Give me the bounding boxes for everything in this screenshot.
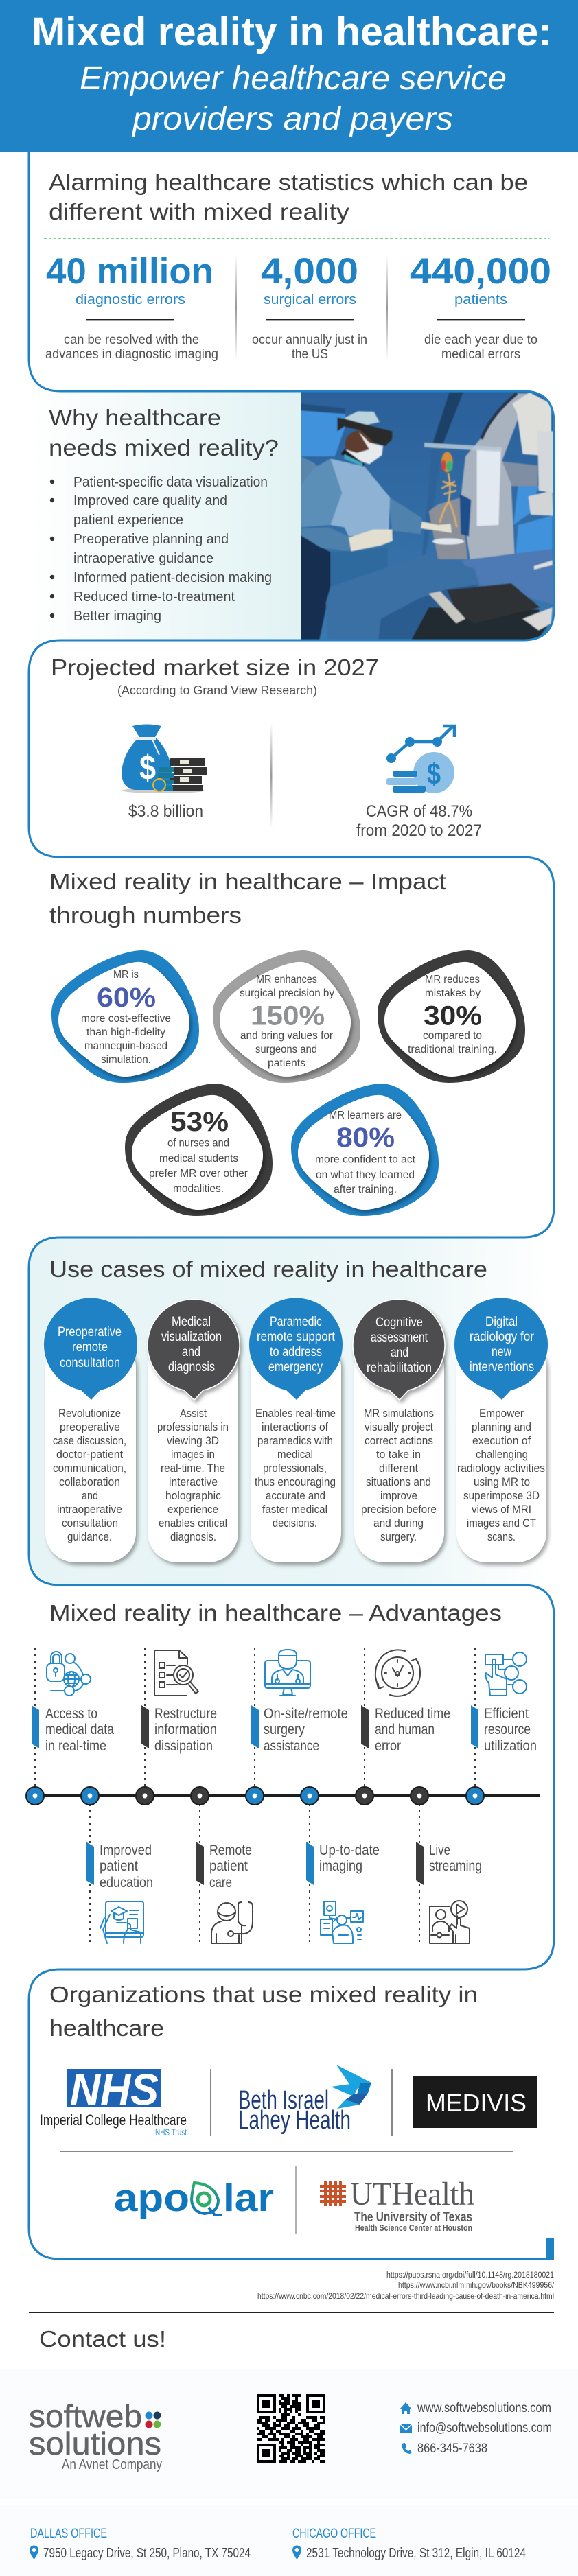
heading — [49, 1982, 478, 2041]
card: digital radiology: radiology activities — [457, 1462, 545, 1475]
card: paramedic remote support: emergency — [268, 1360, 323, 1374]
card: cognitive assessment and rehabilitation: MR simulations — [364, 1407, 434, 1420]
blob: 30 percent: 30% — [424, 1000, 482, 1031]
icon: growth chart with coin — [386, 726, 454, 793]
card: cognitive assessment and rehabilitation: situations and — [366, 1475, 431, 1488]
text: remote patient care: care — [209, 1875, 232, 1890]
text: improved patient education: education — [100, 1875, 153, 1890]
heading: healthcare — [49, 2015, 164, 2041]
title: Mixed reality in healthcare: — [32, 10, 552, 54]
blob: 60 percent: than high-fidelity — [86, 1027, 165, 1038]
card: digital radiology: views of MRI — [472, 1503, 531, 1516]
subtitle: Empower healthcare service — [80, 60, 507, 97]
card: preoperative remote consultation — [44, 1298, 137, 1562]
stat: 4,000: 4,000 — [261, 251, 358, 292]
logo: apoQlar — [114, 2176, 274, 2220]
card: paramedic remote support: faster medical — [262, 1503, 327, 1516]
timeline — [26, 1787, 540, 1805]
card: digital radiology: execution of — [472, 1434, 531, 1447]
text: up-to-date imaging: imaging — [319, 1858, 362, 1874]
stat: 440,000: patients — [454, 292, 507, 307]
heading: Use cases of mixed reality in healthcare — [49, 1256, 487, 1282]
bullet list: Patient-specific data visualization — [73, 475, 268, 490]
card: paramedic remote support: interactions of — [262, 1420, 328, 1433]
card: cognitive assessment and rehabilitation: correct actions — [365, 1434, 433, 1447]
icon: lock and globe — [47, 1652, 91, 1696]
stat: 440,000: medical errors — [441, 347, 520, 362]
stat: 4,000 — [252, 251, 367, 362]
card: paramedic remote support: thus encouraging — [255, 1475, 336, 1488]
logo: Beth Israel Lahey Health — [238, 2065, 371, 2135]
panel: why healthcare needs mixed reality — [49, 392, 555, 642]
text: on-site remote surgery: assistance — [264, 1738, 319, 1754]
blob: 150 percent: MR enhances — [256, 974, 317, 985]
references — [257, 2271, 555, 2301]
contact details: 866-345-7638 — [417, 2442, 487, 2456]
card: cognitive assessment and rehabilitation: rehabilitation — [367, 1361, 432, 1375]
card: preoperative remote consultation: intraoperative — [57, 1503, 122, 1516]
logo: UTHealth: Health Science Center at Houston — [355, 2223, 472, 2233]
card: digital radiology — [454, 1298, 548, 1562]
references: https://www.ncbi.nlm.nih.gov/books/NBK499956/ — [398, 2282, 555, 2290]
panel outline ribbon — [29, 152, 554, 2259]
card: medical visualization and diagnosis: and — [182, 1345, 200, 1359]
blob: 80 percent — [291, 1084, 439, 1216]
card: digital radiology: scans. — [487, 1530, 516, 1543]
bullet list: patient experience — [73, 513, 183, 528]
blob: 60 percent — [51, 950, 199, 1083]
blob: 53 percent: 53% — [170, 1107, 229, 1137]
card: medical visualization and diagnosis: Assist — [180, 1407, 207, 1420]
blob: 53 percent: medical students — [159, 1153, 238, 1164]
photo: surgeon with mixed reality headset — [301, 392, 555, 642]
CAGR text: CAGR of 48.7% — [366, 802, 472, 821]
blob: 60 percent: mannequin-based — [84, 1040, 167, 1052]
heading: Alarming healthcare statistics which can be — [49, 169, 528, 195]
CAGR text — [356, 802, 482, 840]
heading — [49, 405, 279, 460]
bullet list: Informed patient-decision making — [73, 570, 272, 585]
card: paramedic remote support: decisions. — [273, 1517, 317, 1530]
icon: home — [400, 2402, 412, 2414]
heading: Why healthcare — [49, 405, 221, 430]
card: paramedic remote support: to address — [270, 1345, 322, 1359]
blob: 150 percent: patients — [268, 1057, 305, 1069]
card: digital radiology: new — [492, 1345, 511, 1359]
card: medical visualization and diagnosis: visualization — [161, 1330, 222, 1344]
card: paramedic remote support: paramedics with — [257, 1434, 333, 1447]
blob: 150 percent: 150% — [251, 1000, 325, 1031]
subtitle: providers and payers — [131, 101, 453, 137]
card: digital radiology: superimpose 3D — [463, 1489, 540, 1502]
blob: 53 percent: prefer MR over other — [149, 1168, 248, 1180]
text: efficient resource utilization: resource — [484, 1722, 531, 1737]
blob: 150 percent: surgical precision by — [240, 987, 334, 999]
logo: Medivis: MEDIVIS — [426, 2089, 527, 2117]
panel background: why healthcare — [29, 391, 301, 640]
card: medical visualization and diagnosis: interactive — [169, 1475, 218, 1488]
references: https://pubs.rsna.org/doi/full/10.1148/rg.2018180021 — [386, 2271, 554, 2280]
source note: (According to Grand View Research) — [117, 683, 317, 697]
text: efficient resource utilization — [484, 1706, 537, 1754]
text: restructure information: Restructure — [154, 1706, 217, 1722]
heading: Organizations that use mixed reality in — [49, 1982, 478, 2007]
bullet list: Reduced time-to-treatment — [73, 589, 235, 605]
blob: 80 percent: after training. — [334, 1184, 397, 1195]
text: access to medical data — [45, 1706, 114, 1754]
card: paramedic remote support: Paramedic — [270, 1315, 322, 1329]
contact details — [400, 2401, 552, 2456]
stat: 40 million: can be resolved with the — [64, 333, 199, 347]
text: restructure information — [154, 1706, 217, 1754]
card: preoperative remote consultation: consultation — [60, 1356, 120, 1370]
card: cognitive assessment and rehabilitation: to take in — [376, 1448, 421, 1461]
heading: Mixed reality in healthcare – Advantages — [49, 1600, 502, 1626]
heading — [49, 869, 446, 928]
dallas office: 7950 Legacy Drive, St 250, Plano, TX 75024 — [43, 2546, 251, 2561]
card: paramedic remote support: remote support — [257, 1330, 336, 1344]
chicago office: CHICAGO OFFICE — [292, 2527, 376, 2541]
text: improved patient education: patient — [100, 1858, 138, 1874]
tab markers — [32, 1705, 478, 1885]
card: cognitive assessment and rehabilitation: improve — [380, 1489, 417, 1502]
bullet list: intraoperative guidance — [73, 551, 213, 566]
logo: Medivis — [413, 2076, 537, 2128]
logo: NHS Imperial College Healthcare: Imperial College Healthcare — [40, 2111, 187, 2129]
dallas office — [30, 2527, 251, 2561]
subtitle — [80, 60, 507, 137]
card: preoperative remote consultation: and — [82, 1489, 98, 1502]
panel: organizations — [40, 1982, 554, 2260]
text: restructure information: dissipation — [154, 1738, 213, 1754]
heading: needs mixed reality? — [49, 435, 279, 460]
logo: NHS Imperial College Healthcare: NHS Trust — [155, 2127, 187, 2138]
bullet list: Better imaging — [73, 609, 161, 624]
text: on-site remote surgery — [264, 1706, 348, 1754]
contact details: info@softwebsolutions.com — [417, 2421, 552, 2435]
icon: clock — [375, 1650, 420, 1696]
text: reduced time — [375, 1706, 450, 1754]
card: medical visualization and diagnosis: images in — [171, 1448, 215, 1461]
text: up-to-date imaging: Up-to-date — [319, 1842, 380, 1858]
panel: use cases — [44, 1256, 548, 1562]
blob: 60 percent: MR is — [113, 969, 139, 981]
card: paramedic remote support — [249, 1298, 343, 1562]
card: paramedic remote support: professionals, — [263, 1462, 327, 1475]
card: cognitive assessment and rehabilitation: and during — [373, 1517, 424, 1530]
logo: apoQlar: lar — [223, 2176, 274, 2220]
card: preoperative remote consultation: consultation — [62, 1517, 118, 1530]
icon: live streaming — [430, 1901, 470, 1943]
logo: softweb solutions: solutions — [29, 2426, 161, 2461]
stat: 40 million: advances in diagnostic imaging — [45, 347, 218, 362]
icon: envelope — [400, 2424, 412, 2433]
bullet list — [50, 475, 272, 624]
blob: 53 percent: of nurses and — [167, 1138, 229, 1149]
heading: Mixed reality in healthcare – Impact — [49, 869, 446, 894]
text: improved patient education: Improved — [100, 1842, 152, 1858]
text: live streaming — [429, 1842, 482, 1874]
icon: money bag — [122, 725, 207, 793]
heading: Projected market size in 2027 — [51, 655, 379, 680]
footer: offices — [0, 2505, 578, 2576]
card: digital radiology: interventions — [470, 1360, 534, 1374]
card: medical visualization and diagnosis: viewing 3D — [167, 1434, 219, 1447]
contact details: www.softwebsolutions.com — [417, 2401, 551, 2415]
text: efficient resource utilization: utilization — [484, 1738, 537, 1754]
text: access to medical data: medical data — [45, 1722, 114, 1737]
icon: hand and network — [485, 1652, 527, 1696]
card: medical visualization and diagnosis: experience — [167, 1503, 218, 1516]
text: on-site remote surgery: surgery — [264, 1722, 305, 1737]
card: medical visualization and diagnosis: diagnosis. — [170, 1530, 216, 1543]
text: remote patient care: patient — [209, 1858, 248, 1874]
text: reduced time: error — [375, 1738, 401, 1754]
bullet list: Preoperative planning and — [73, 532, 229, 547]
heading: through numbers — [49, 902, 242, 928]
heading — [49, 169, 528, 224]
text: access to medical data: in real-time — [45, 1738, 106, 1754]
text: restructure information: information — [154, 1722, 217, 1737]
dallas office: DALLAS OFFICE — [30, 2527, 107, 2541]
card: medical visualization and diagnosis: holographic — [165, 1489, 221, 1502]
blob: 80 percent: more confident to act — [315, 1154, 416, 1165]
stat: 440,000: 440,000 — [410, 251, 551, 292]
card: medical visualization and diagnosis — [148, 1299, 240, 1562]
icon: doctor with stethoscope — [211, 1902, 253, 1943]
card: preoperative remote consultation: preoperative — [60, 1420, 120, 1433]
text: reduced time: Reduced time — [375, 1706, 450, 1722]
logo: Beth Israel Lahey Health: Beth Israel — [238, 2086, 329, 2115]
stat: 440,000 — [410, 251, 551, 362]
stat: 4,000: occur annually just in — [252, 333, 367, 347]
card: cognitive assessment and rehabilitation: assessment — [371, 1331, 428, 1345]
card: paramedic remote support: medical — [277, 1448, 313, 1461]
stat: 440,000: die each year due to — [424, 333, 537, 347]
card: medical visualization and diagnosis: diagnosis — [168, 1360, 215, 1374]
card: cognitive assessment and rehabilitation: precision before — [361, 1503, 437, 1516]
logo: apoQlar: apo — [114, 2176, 189, 2220]
blob: 53 percent: modalities. — [173, 1183, 224, 1195]
card: digital radiology: radiology for — [470, 1330, 535, 1344]
blob: 150 percent: and bring values for — [240, 1030, 334, 1042]
QR code — [257, 2396, 325, 2461]
card: paramedic remote support: accurate and — [266, 1489, 325, 1502]
text: up-to-date imaging — [319, 1842, 380, 1874]
text: live streaming: streaming — [429, 1858, 482, 1874]
blob: 30 percent — [378, 950, 525, 1083]
blob: 30 percent: traditional training. — [408, 1044, 497, 1055]
card: digital radiology: Digital — [485, 1315, 518, 1329]
card: preoperative remote consultation: guidance. — [67, 1530, 112, 1543]
card: cognitive assessment and rehabilitation: Cognitive — [375, 1315, 423, 1330]
card: digital radiology: using MR to — [474, 1475, 530, 1488]
stat: 40 million: diagnostic errors — [76, 292, 185, 307]
chicago office — [292, 2527, 526, 2561]
logo: softweb solutions — [29, 2398, 162, 2472]
panel: alarming statistics — [44, 169, 551, 362]
card: medical visualization and diagnosis: Medical — [172, 1315, 211, 1329]
icon: monitor with doctor — [265, 1650, 310, 1696]
card: medical visualization and diagnosis: real-time. The — [161, 1462, 225, 1475]
card: cognitive assessment and rehabilitation: and — [391, 1346, 408, 1360]
text: access to medical data: Access to — [45, 1706, 97, 1722]
panel background: use cases — [29, 1237, 549, 1585]
text: on-site remote surgery: On-site/remote — [264, 1706, 348, 1722]
logo: UTHealth: The University of Texas — [354, 2210, 472, 2225]
card: preoperative remote consultation: remote — [72, 1340, 108, 1355]
blob: 60 percent: 60% — [97, 983, 156, 1013]
blob: 60 percent: more cost-effective — [81, 1013, 171, 1024]
card: cognitive assessment and rehabilitation: visually project — [365, 1420, 433, 1433]
icon: tablet education — [100, 1901, 143, 1943]
blob: 30 percent: MR reduces — [425, 974, 480, 985]
blob: 30 percent: mistakes by — [425, 987, 481, 999]
text: remote patient care — [209, 1842, 252, 1890]
card: cognitive assessment and rehabilitation: surgery. — [380, 1530, 417, 1543]
card: digital radiology: Empower — [479, 1407, 524, 1420]
text: live streaming: Live — [429, 1842, 450, 1858]
header banner — [0, 0, 578, 152]
card: preoperative remote consultation: Preoperative — [58, 1325, 122, 1339]
text: remote patient care: Remote — [209, 1842, 252, 1858]
card: preoperative remote consultation: collaboration — [59, 1475, 120, 1488]
blob: 150 percent — [213, 950, 360, 1083]
card: preoperative remote consultation: doctor-patient — [56, 1448, 123, 1461]
logo: softweb solutions: softweb — [29, 2398, 142, 2434]
stat: 40 million — [45, 251, 218, 362]
card: preoperative remote consultation: Revolutionize — [58, 1407, 121, 1420]
card: digital radiology: planning and — [472, 1420, 531, 1433]
logo: softweb solutions: An Avnet Company — [62, 2457, 162, 2472]
footer: contact band — [0, 2369, 578, 2499]
blob: 30 percent: compared to — [423, 1030, 482, 1042]
logo: UTHealth: UTHealth — [350, 2176, 474, 2212]
card: preoperative remote consultation: communication, — [53, 1462, 126, 1475]
logo: Beth Israel Lahey Health: Lahey Health — [238, 2106, 351, 2135]
stat: 4,000: the US — [292, 347, 328, 362]
panel: projected market size — [51, 655, 482, 840]
references: https://www.cnbc.com/2018/02/22/medical-errors-third-leading-cause-of-death-in-america.html — [257, 2293, 554, 2301]
blob: 80 percent: 80% — [336, 1123, 395, 1153]
text: reduced time: and human — [375, 1722, 435, 1737]
blob: 150 percent: surgeons and — [255, 1044, 317, 1055]
icon: imaging network — [321, 1901, 363, 1943]
bullet list: Improved care quality and — [73, 493, 227, 508]
icon: growth chart with coin: $ — [427, 758, 441, 791]
text: efficient resource utilization: Efficient — [484, 1706, 529, 1722]
contact heading: Contact us! — [39, 2326, 166, 2352]
market value: $3.8 billion — [128, 802, 203, 821]
text: improved patient education — [100, 1842, 153, 1890]
logo: NHS Imperial College Healthcare — [40, 2065, 187, 2138]
card: cognitive assessment and rehabilitation: different — [379, 1462, 418, 1475]
CAGR text: from 2020 to 2027 — [356, 821, 482, 840]
icon: document and magnifier — [154, 1650, 198, 1696]
icon: money bag: $ — [139, 749, 156, 787]
heading: different with mixed reality — [49, 199, 350, 224]
card: medical visualization and diagnosis: enables critical — [159, 1517, 227, 1530]
logo: UTHealth — [320, 2176, 474, 2233]
card: preoperative remote consultation: case discussion, — [53, 1434, 126, 1447]
stat: 4,000: surgical errors — [264, 292, 356, 307]
card: cognitive assessment and rehabilitation — [353, 1299, 445, 1562]
blob: 60 percent: simulation. — [101, 1054, 151, 1066]
stat: 40 million: 40 million — [46, 251, 213, 292]
card: paramedic remote support: Enables real-time — [255, 1407, 336, 1420]
icon: phone — [402, 2443, 412, 2454]
logo: NHS Imperial College Healthcare: NHS — [70, 2065, 159, 2114]
panel: impact through numbers — [49, 869, 525, 1216]
blob: 80 percent: MR learners are — [329, 1110, 402, 1121]
blob: 80 percent: on what they learned — [316, 1169, 415, 1181]
panel: advantages timeline — [26, 1600, 540, 1945]
card: digital radiology: challenging — [476, 1448, 528, 1461]
blob: 53 percent — [125, 1084, 273, 1216]
card: medical visualization and diagnosis: professionals in — [157, 1420, 229, 1433]
card: digital radiology: images and CT — [467, 1517, 536, 1530]
